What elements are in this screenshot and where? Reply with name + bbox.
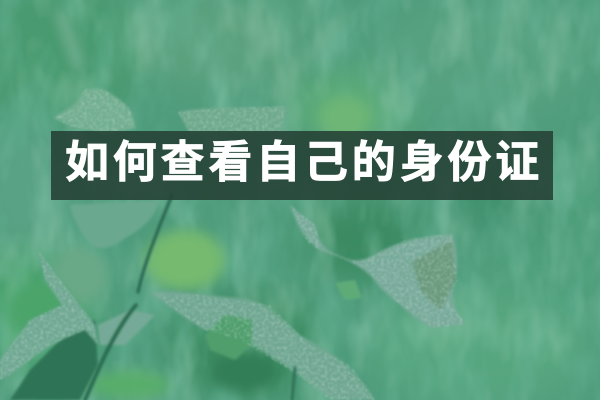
soft light leaf bbox=[145, 230, 225, 290]
stems bbox=[85, 195, 295, 400]
leaves bbox=[0, 88, 466, 400]
reddish patch on right leaf bbox=[412, 240, 456, 310]
dark leaf in lower left bbox=[10, 320, 98, 400]
dew texture on leaves bbox=[0, 88, 466, 400]
title text: 如何查看自己的身份证 bbox=[65, 138, 543, 187]
title banner bbox=[51, 131, 553, 200]
green patches on bottom leaf bbox=[205, 315, 252, 360]
